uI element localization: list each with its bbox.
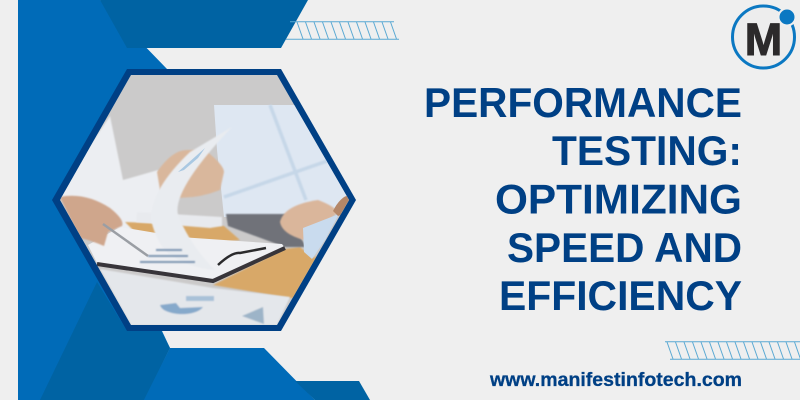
logo (732, 6, 796, 68)
title: SPEED AND (507, 224, 742, 271)
panel: bottom blue shape (144, 348, 315, 400)
photo: right table (213, 246, 318, 299)
photo: right hand (280, 200, 338, 240)
photo: left hand (60, 196, 122, 246)
photo: wrist at edge (333, 195, 349, 216)
title: TESTING: (552, 127, 742, 174)
photo: laptop screen (214, 105, 360, 217)
photo: shirt cuff (303, 214, 339, 259)
panel: bottom left dark shape (40, 282, 170, 400)
photo: blurred lower report (100, 269, 290, 325)
hatched strip: bottom (665, 342, 800, 359)
photo: clipboard (88, 227, 285, 283)
photo: business documents on desk (60, 75, 349, 325)
panel: left blue band (18, 0, 170, 400)
hatched strip: top (286, 22, 399, 39)
title: EFFICIENCY (499, 272, 742, 319)
panel: top dark trapezoid (100, 0, 308, 48)
photo: paper stack (136, 212, 222, 228)
photo: laptop base (226, 214, 306, 247)
logo dot (778, 8, 796, 26)
panel: bottom right dark shape (295, 381, 370, 400)
website url: www.manifestinfotech.com (489, 369, 742, 391)
title: OPTIMIZING (495, 176, 742, 222)
hexagon frame (52, 69, 356, 331)
photo: shirt and sleeve (61, 116, 160, 229)
photo: upper table (124, 221, 240, 241)
photo: raised page (151, 131, 227, 238)
title: PERFORMANCE (424, 79, 742, 126)
title (424, 79, 742, 319)
photo: chart lines (140, 250, 195, 262)
photo: holding hand (157, 150, 224, 198)
logo letter: M (745, 14, 782, 65)
photo: pen (103, 224, 148, 256)
